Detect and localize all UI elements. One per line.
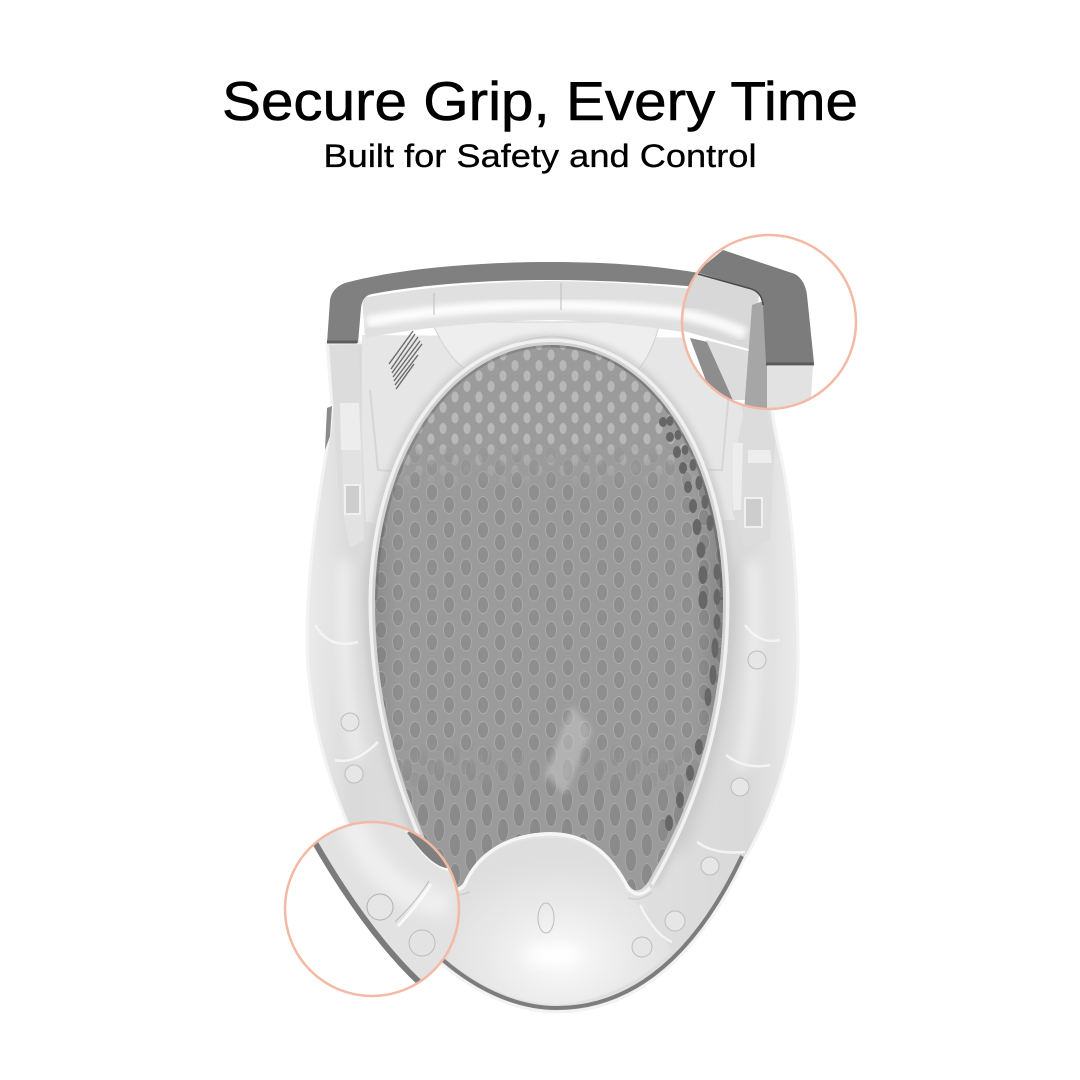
handle grey band bbox=[327, 262, 705, 343]
side clips bbox=[345, 485, 762, 527]
moulded chevrons bbox=[315, 625, 780, 942]
subtitle: Built for Safety and Control bbox=[324, 138, 756, 174]
magnified grey grip edge bbox=[314, 841, 420, 983]
care label sticker bbox=[389, 331, 422, 389]
handle inner bar bbox=[362, 281, 740, 342]
left arm detail bbox=[330, 345, 366, 545]
body shading and highlights bbox=[344, 560, 754, 850]
title: Secure Grip, Every Time bbox=[222, 70, 858, 132]
magnified crease bbox=[398, 884, 431, 926]
dark holes on right edge bbox=[659, 416, 720, 831]
magnified mesh corner bbox=[404, 830, 448, 871]
front dome bbox=[448, 838, 672, 1004]
moulded bumps bbox=[341, 651, 766, 957]
magnified rim bbox=[318, 823, 458, 980]
upper recess bbox=[362, 335, 745, 530]
magnified panels bbox=[690, 338, 733, 400]
right arm detail bbox=[732, 405, 775, 548]
rim around mesh bbox=[375, 345, 723, 882]
magnified arm bbox=[744, 300, 768, 412]
magnified grip band bbox=[696, 250, 814, 363]
bottom grey edge bbox=[443, 856, 742, 1008]
magnified white bar bbox=[683, 273, 759, 349]
seat body bbox=[307, 340, 798, 1012]
callout circle: handle grip detail bbox=[680, 235, 856, 412]
mesh seat bbox=[370, 340, 730, 900]
callout circle: rim grip detail bbox=[285, 815, 470, 996]
mesh highlight bbox=[545, 705, 592, 795]
dome highlight bbox=[525, 945, 581, 965]
product: bath seat bbox=[307, 262, 798, 1012]
